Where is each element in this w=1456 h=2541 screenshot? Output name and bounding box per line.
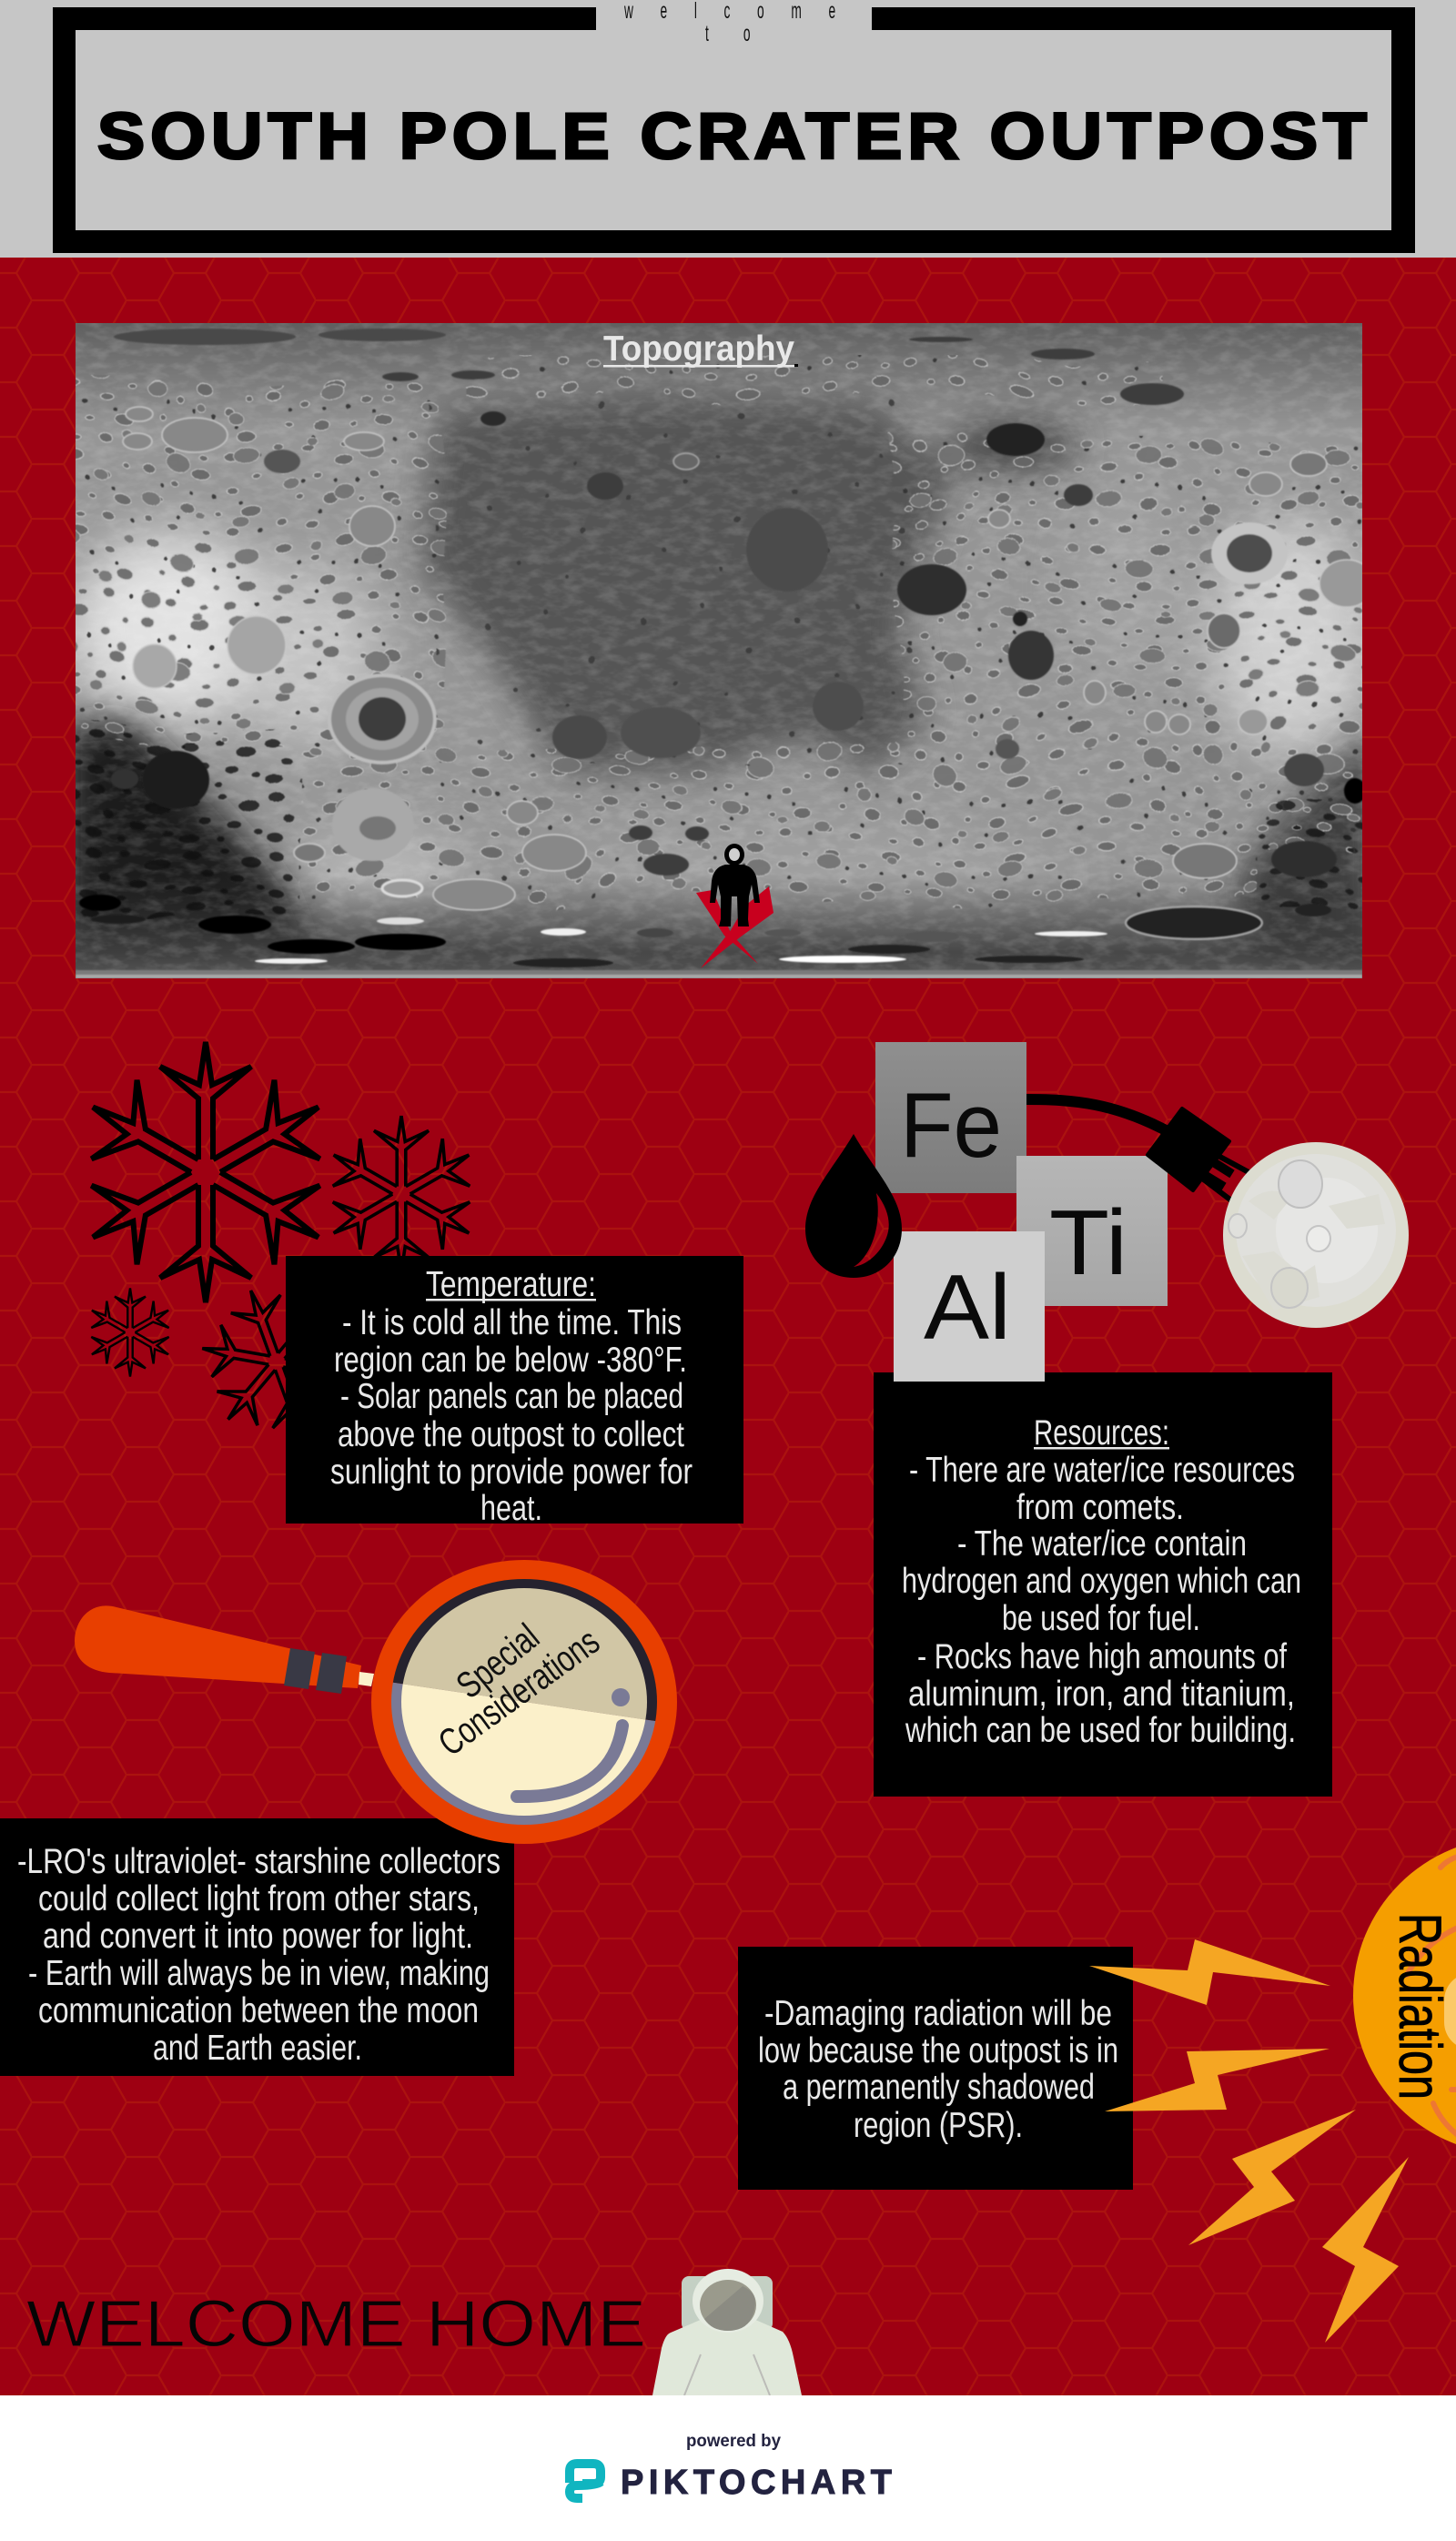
temperature text: sunlight to provide power for <box>330 1453 693 1492</box>
icon group: snowflakes <box>70 1042 482 1459</box>
radiation text: low because the outpost is in <box>758 2031 1118 2070</box>
text: welcome home: WELCOME HOME <box>26 2288 646 2361</box>
icon: element tile Al: Al <box>924 1257 1011 1359</box>
temperature text <box>330 1303 693 1528</box>
footer band <box>0 2395 1456 2541</box>
title: SOUTH POLE CRATER OUTPOST <box>97 99 1367 172</box>
header frame <box>53 7 1415 253</box>
radiation text <box>758 1994 1118 2145</box>
magnifier label <box>430 1615 607 1764</box>
icon: lightning bolts <box>1089 1939 1409 2343</box>
icon: element tile Fe <box>875 1042 1026 1193</box>
special considerations text <box>17 1842 500 2068</box>
special considerations text: communication between the moon <box>38 1991 479 2030</box>
special considerations text: and Earth easier. <box>153 2029 362 2068</box>
icon: water drop <box>805 1134 902 1278</box>
panel: radiation <box>738 1947 1133 2190</box>
header band <box>0 0 1456 258</box>
special considerations text: -LRO's ultraviolet- starshine collectors <box>17 1842 500 1881</box>
moon surface map <box>46 323 1383 978</box>
sun label: Radiation <box>1387 1913 1454 2100</box>
piktochart wordmark: PIKTOCHART <box>621 2464 892 2502</box>
radiation text: a permanently shadowed <box>783 2068 1095 2107</box>
icon: element tile Ti: Ti <box>1049 1192 1127 1294</box>
icon: magnifying glass <box>75 1560 677 1844</box>
special considerations text: - Earth will always be in view, making <box>28 1954 490 1993</box>
resources heading: Resources: <box>1034 1413 1169 1453</box>
temperature text: above the outpost to collect <box>338 1415 684 1454</box>
red X landing marker <box>696 886 774 968</box>
icon: element tile Al <box>894 1231 1045 1382</box>
radiation text: region (PSR). <box>854 2106 1023 2145</box>
resources text: aluminum, iron, and titanium, <box>908 1675 1295 1714</box>
resources text: - The water/ice contain <box>957 1524 1247 1564</box>
resources text <box>902 1451 1301 1750</box>
special considerations text: could collect light from other stars, <box>38 1879 480 1918</box>
special considerations text: and convert it into power for light. <box>43 1917 473 1956</box>
radiation text: -Damaging radiation will be <box>764 1994 1112 2033</box>
panel: special considerations <box>0 1818 514 2076</box>
powered by: powered by <box>686 2432 781 2451</box>
resources text: be used for fuel. <box>1002 1599 1200 1638</box>
welcome to <box>623 0 835 46</box>
icon: sun <box>1353 1837 1456 2154</box>
resources text: - There are water/ice resources <box>909 1451 1295 1490</box>
panel: temperature <box>286 1256 743 1528</box>
panel: resources <box>874 1372 1332 1797</box>
icon: element tile Fe: Fe <box>900 1075 1002 1177</box>
temperature heading: Temperature: <box>426 1265 596 1304</box>
icon: astronaut <box>652 2269 802 2395</box>
astronaut silhouette <box>710 844 760 926</box>
welcome to: to <box>705 22 751 46</box>
temperature text: region can be below -380°F. <box>334 1341 687 1380</box>
magnifier lens <box>371 1560 677 1844</box>
magnifier label: Special <box>449 1615 547 1706</box>
temperature text: - Solar panels can be placed <box>340 1377 683 1416</box>
temperature text: heat. <box>480 1489 542 1528</box>
scattered craters <box>46 355 1383 919</box>
icon: element tile Ti <box>1016 1156 1168 1306</box>
resources text: - Rocks have high amounts of <box>917 1637 1287 1676</box>
icon: cable and plug <box>1026 1099 1250 1200</box>
icon: piktochart logo <box>570 2464 601 2498</box>
resources text: from comets. <box>1016 1488 1184 1527</box>
icon: moon <box>1223 1142 1409 1328</box>
resources text: which can be used for building. <box>905 1711 1296 1750</box>
temperature text: - It is cold all the time. This <box>342 1303 682 1342</box>
resources text: hydrogen and oxygen which can <box>902 1562 1301 1601</box>
magnifier handle <box>75 1605 374 1694</box>
magnifier label: Considerations <box>430 1620 607 1764</box>
heading: Topography: Topography <box>603 329 794 369</box>
panel: topography map <box>46 323 1383 978</box>
